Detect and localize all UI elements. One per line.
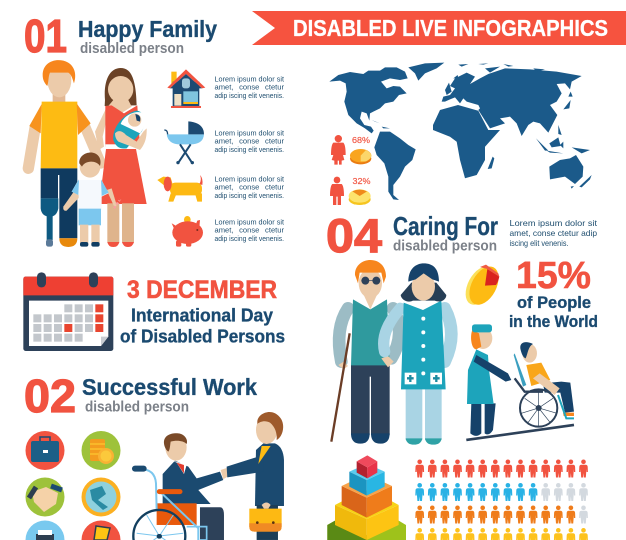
lorem block 4: adip iscing elit venenis. (214, 234, 284, 243)
section 01 heading (24, 10, 217, 62)
december title: 3 DECEMBER (127, 276, 277, 304)
row: yellow (415, 528, 588, 540)
nurse (384, 263, 451, 445)
stat: 68 percent (331, 135, 371, 165)
world map (329, 63, 592, 200)
row: red (415, 460, 588, 478)
section 04 heading: Caring For (393, 211, 498, 241)
lorem block 2: Lorem ipsum dolor sit (214, 128, 284, 138)
boy (63, 153, 126, 247)
lorem block caring: Lorem ipsum dolor sit (510, 218, 598, 228)
calendar (23, 272, 113, 351)
row: orange (415, 506, 588, 524)
lorem block 2: adip iscing elit venenis. (214, 145, 284, 154)
row: blue (415, 483, 588, 501)
businessman in wheelchair (132, 433, 228, 540)
section 02 heading: Successful Work (82, 374, 257, 400)
pie chart 15 percent (460, 262, 505, 310)
section 04 heading: 04 (326, 209, 382, 262)
family illustration (28, 60, 147, 247)
figure 68 (331, 135, 346, 165)
icon: house (167, 69, 205, 108)
lorem block caring: amet, conse ctetur adip (510, 228, 597, 238)
stat: 32 percent (330, 176, 371, 205)
stat: 68 percent: 68% (352, 135, 370, 145)
lorem block 3: Lorem ipsum dolor sit (214, 174, 284, 184)
icon: baby carriage (164, 121, 204, 164)
section 01 heading: disabled person (80, 40, 184, 57)
standing businessman (227, 412, 284, 540)
15 percent text: 15% (516, 255, 591, 297)
lorem block 1: adip iscing elit venenis. (214, 91, 284, 100)
lorem block 4: Lorem ipsum dolor sit (214, 218, 284, 226)
icon: globe circle (82, 478, 120, 516)
section 02 heading: disabled person (85, 398, 189, 416)
caring illustration (331, 260, 574, 445)
icon: coins circle (82, 431, 120, 470)
15 percent text (509, 255, 598, 331)
lorem block 2: amet, conse ctetur (214, 137, 285, 146)
15 percent text: of People (517, 293, 591, 312)
lorem block 4: amet, conse ctetur (214, 226, 285, 235)
block pyramid (327, 455, 406, 540)
icon: briefcase circle (26, 431, 64, 470)
handshake illustration (132, 412, 284, 540)
section 04 heading (326, 209, 498, 262)
lorem block 1 (214, 74, 285, 100)
icon: handshake circle (26, 478, 64, 516)
pie 32 (349, 189, 371, 205)
lorem block 3: amet, conse ctetur (214, 183, 285, 192)
lorem block 4 (214, 218, 285, 243)
icon: piggy bank (172, 216, 203, 247)
icon: dog (157, 175, 203, 202)
lorem block 1: amet, conse ctetur (214, 83, 285, 92)
lorem block 3: adip iscing elit venenis. (214, 191, 284, 200)
lorem block caring: iscing elit venenis. (510, 238, 568, 248)
section 01 heading: 01 (24, 10, 67, 62)
lorem block 2 (214, 128, 285, 154)
lorem block 1: Lorem ipsum dolor sit (214, 74, 284, 84)
icon: phone circle (82, 520, 120, 540)
section 01 heading: Happy Family (78, 16, 217, 42)
stat: 32 percent: 32% (352, 176, 371, 186)
lorem block caring (510, 218, 598, 248)
section 02 heading (24, 370, 257, 422)
lorem block 3 (214, 174, 285, 200)
section 02 heading: 02 (24, 370, 76, 422)
people chart (415, 460, 588, 540)
december title: of Disabled Persons (120, 326, 285, 346)
section 04 heading: disabled person (393, 238, 497, 254)
nurse pushing wheelchair (466, 324, 574, 440)
icon: printer circle (26, 520, 64, 540)
baby (113, 111, 144, 149)
december title (120, 276, 285, 346)
blind man (331, 260, 399, 444)
15 percent text: in the World (509, 312, 598, 331)
banner (252, 11, 626, 45)
father (28, 60, 101, 247)
december title: International Day (131, 306, 273, 326)
pie 68 (350, 149, 371, 164)
figure 32 (330, 177, 344, 205)
mother (95, 68, 147, 247)
